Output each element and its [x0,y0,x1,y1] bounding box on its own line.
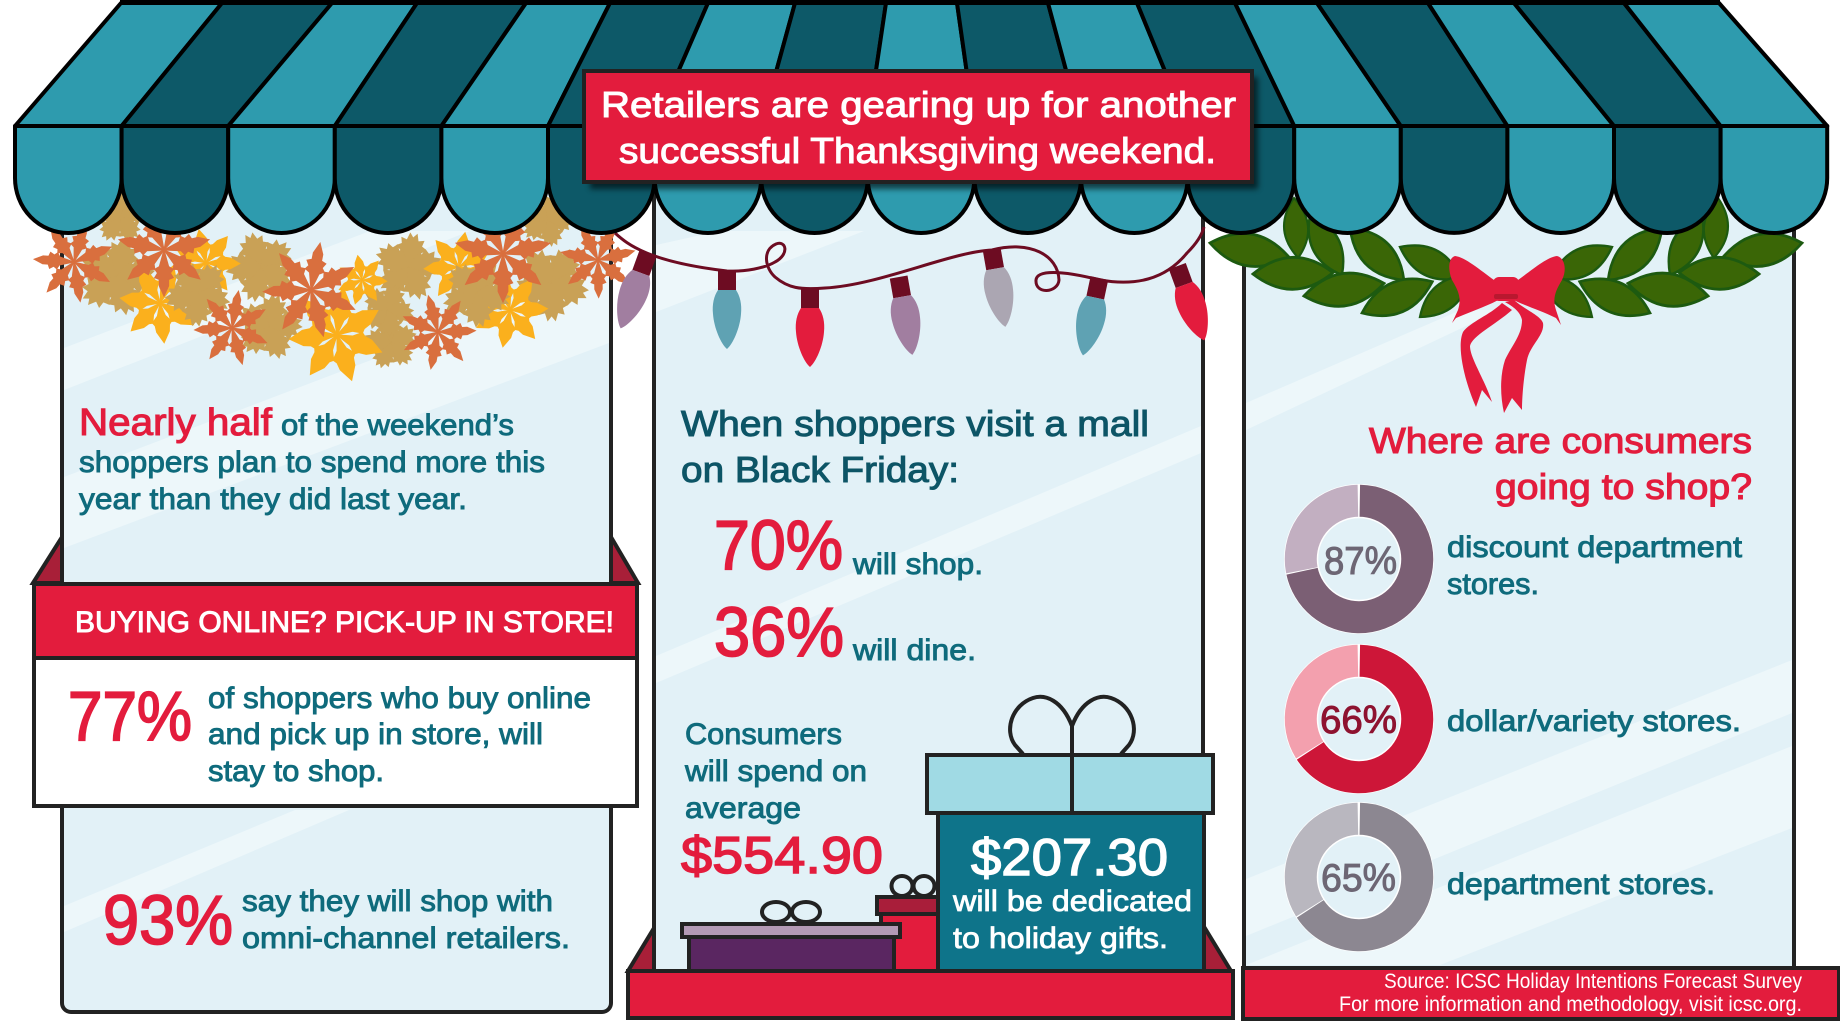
callout panel: buying online, pick-up in store: of shoppers who buy online [208,682,591,715]
text block: nearly half: Nearly half [79,402,272,444]
stat: 70 percent will shop [714,506,983,584]
panel: centre shop window [654,100,1203,980]
source footer bar: For more information and methodology, visit icsc.org. [1339,993,1802,1016]
callout panel: buying online, pick-up in store [33,537,638,806]
leaf garland: autumn leaves [18,185,648,389]
donut chart: 87 percent discount department stores: 87% [1324,540,1397,583]
stat: 93 percent omni-channel: 93% [103,881,233,959]
panel: right shop window [1244,100,1794,980]
stat: 36 percent will dine: 36% [714,593,844,671]
stat: average spend: Consumers [685,718,842,751]
panel: left shop window [62,100,611,1012]
callout panel: buying online, pick-up in store: stay to shop. [208,755,384,788]
icon: purple gift box [682,902,900,971]
callout panel: buying online, pick-up in store: and pick up in store, will [208,718,543,751]
callout panel: buying online, pick-up in store: BUYING ONLINE? PICK-UP IN STORE! [75,606,614,639]
title banner [584,71,1258,189]
text block: nearly half: year than they did last year. [79,483,467,516]
callout panel: buying online, pick-up in store: 77% [68,677,192,755]
stat: average spend: $554.90 [681,827,883,885]
donut chart: 66 percent dollar and variety stores [1279,639,1439,799]
string of holiday lights [607,227,1218,367]
heading: mall visit on Black Friday: on Black Friday: [681,449,959,490]
text block: nearly half: shoppers plan to spend more this [79,446,545,479]
awning: sloped striped roof [15,3,1827,126]
stat: 70 percent will shop: 70% [714,506,843,584]
title banner: successful Thanksgiving weekend. [619,130,1216,171]
shelf: centre window [628,925,1233,1018]
donut chart: 65 percent department stores [1279,797,1439,957]
icon: large gift box with holiday spend: $207.30 [971,829,1168,887]
icon: large gift box with holiday spend: will be dedicated [952,885,1192,918]
source footer bar [1243,968,1839,1019]
label: discount department stores: stores. [1447,568,1539,601]
icon: large gift box with holiday spend [927,697,1213,971]
heading: where are consumers going: Where are consumers [1369,420,1752,461]
icon: small red gift box [877,876,939,971]
stat: 36 percent will dine [714,593,976,671]
text block: nearly half [79,402,545,516]
donut chart: 65 percent department stores: 65% [1321,857,1396,900]
donut chart: 66 percent dollar and variety stores: 66% [1320,699,1397,742]
stat: 70 percent will shop: will shop. [852,548,983,581]
awning: scalloped valance [15,0,1827,233]
laurel garland with red bow [1207,197,1805,413]
label: discount department stores: discount department [1447,531,1743,564]
stat: average spend: will spend on [684,755,867,788]
title banner: Retailers are gearing up for another [601,84,1236,125]
donut chart: 87 percent discount department stores [1284,484,1434,634]
stat: average spend [681,718,883,885]
heading: where are consumers going [1369,420,1752,507]
heading: mall visit on Black Friday [681,403,1149,490]
stat: 93 percent omni-channel [103,881,570,959]
icon: large gift box with holiday spend: to holiday gifts. [953,922,1168,955]
stat: 93 percent omni-channel: omni-channel retailers. [242,922,570,955]
stat: 36 percent will dine: will dine. [852,634,976,667]
text block: nearly half: of the weekend’s [281,409,514,442]
label: discount department stores [1447,531,1743,601]
label: department stores: department stores. [1447,868,1715,901]
label: dollar and variety stores: dollar/variety stores. [1447,705,1741,738]
stat: average spend: average [685,792,801,825]
heading: where are consumers going: going to shop? [1495,466,1752,507]
source footer bar: Source: ICSC Holiday Intentions Forecast Survey [1384,970,1802,993]
stat: 93 percent omni-channel: say they will shop with [242,885,553,918]
heading: mall visit on Black Friday: When shoppers visit a mall [681,403,1149,444]
